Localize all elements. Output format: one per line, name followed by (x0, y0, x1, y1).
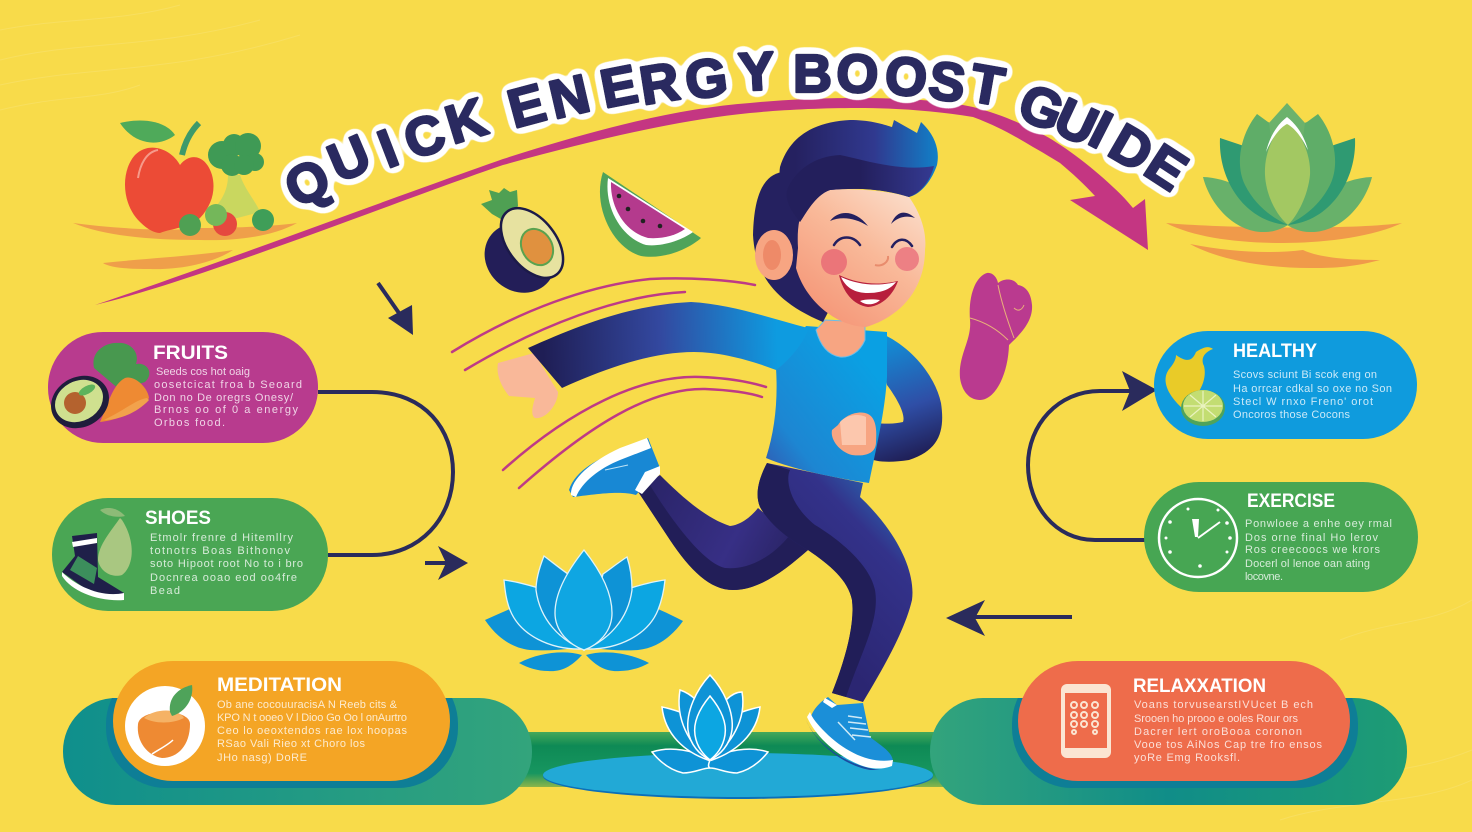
nose (875, 256, 888, 265)
fist (832, 412, 876, 455)
side petals light (504, 580, 665, 649)
icon: footprint (960, 273, 1032, 400)
lotus crown (1269, 103, 1305, 160)
neck (816, 320, 865, 357)
inner ear (763, 240, 781, 270)
body text: fruits (154, 366, 302, 429)
ear (755, 230, 793, 280)
apple highlight (138, 150, 158, 178)
body text: healthy: Scovs sciunt Bi scok eng on (1233, 369, 1377, 381)
panel: exercise (1144, 482, 1418, 592)
lotus ground swooshes (1166, 223, 1402, 268)
icon: lemon and lime (1166, 347, 1225, 426)
small blue lotus (652, 675, 768, 773)
body text: exercise (1245, 518, 1392, 583)
runner character (497, 120, 942, 770)
heading: relaxation: RELAXXATION (1133, 676, 1266, 697)
body text: exercise: locovne. (1245, 571, 1283, 583)
apple leaf (120, 121, 175, 143)
eyes (834, 238, 912, 247)
base band: centre (505, 732, 960, 787)
icon: watermelon (600, 172, 701, 257)
body text: healthy: Stecl W rnxo Freno' orot (1233, 396, 1373, 408)
back leg (637, 475, 808, 590)
back arm (869, 332, 942, 462)
body text: shoes: soto Hipoot root No to i bro (150, 558, 303, 570)
broccoli stalk (213, 175, 260, 222)
body text: meditation: KPO N t ooeo V l Dioo Go Oo l onAurtro (217, 712, 407, 724)
body text: exercise: Docerl ol lenoe oan ating (1245, 558, 1370, 570)
apple stem (182, 123, 199, 155)
front arm sleeve (528, 302, 808, 388)
illustration: fruit and vegetables top left (73, 121, 297, 269)
illustration: green lotus top right (1166, 103, 1402, 268)
title: QUICK ENERGY BOOST GUIDE (275, 41, 1198, 219)
side petals dark (536, 556, 632, 650)
front hand (497, 353, 558, 418)
blue pool (543, 753, 933, 797)
lower shoe (806, 697, 893, 770)
heading: fruits: FRUITS (153, 343, 228, 364)
body text: fruits: Brnos oo of 0 a energy (154, 404, 298, 416)
hair top (780, 120, 938, 222)
base band: right (930, 698, 1407, 805)
blue lotus (485, 550, 683, 671)
panel: meditation (106, 661, 458, 788)
heading: meditation: MEDITATION (217, 675, 342, 696)
lotus petals (1203, 114, 1288, 232)
body text: exercise: Ros creecoocs we krors (1245, 544, 1380, 556)
body text: fruits: Seeds cos hot oaig (156, 366, 250, 378)
icon: avocado (470, 188, 576, 307)
body text: relaxation: Voans torvusearstIVUcet B ech (1134, 699, 1313, 711)
body text: relaxation: Srooen ho prooo e ooles Rour ors (1134, 713, 1298, 725)
body text: meditation (217, 699, 408, 764)
avocado highlight (77, 382, 97, 398)
torso shirt (766, 326, 887, 483)
small peas (179, 214, 201, 236)
lotus petals mirrored (1287, 114, 1372, 232)
centre petal (555, 550, 612, 650)
upper shoe (569, 438, 660, 497)
apple (125, 148, 214, 233)
outer petals (485, 600, 683, 650)
motion lines (452, 278, 766, 488)
teeth (841, 277, 896, 304)
body text: relaxation: Vooe tos AiNos Cap tre fro ensos (1134, 739, 1322, 751)
icon: orange bowl (125, 685, 205, 766)
back leg shade (637, 482, 808, 590)
cheeks (821, 249, 847, 275)
front leg shade (758, 463, 876, 697)
body text: meditation: Ob ane cocouuracisA N Reeb cits & (217, 699, 398, 711)
mouth (839, 275, 898, 307)
pool shadow (543, 753, 933, 799)
panel: shoes (52, 498, 328, 611)
lotus centre (1265, 118, 1310, 225)
body text: healthy: Oncoros those Cocons (1233, 409, 1350, 421)
broccoli top (208, 133, 264, 176)
lower petals (519, 652, 649, 671)
energy arc arrow (95, 98, 1148, 305)
icon: clock (1159, 499, 1237, 577)
body text: healthy (1233, 369, 1392, 421)
body text: fruits: oosetcicat froa b Seoard (154, 379, 302, 391)
connector: exercise to healthy (1028, 371, 1157, 540)
body text: shoes: totnotrs Boas Bithonov (150, 545, 290, 557)
body text: fruits: Orbos food. (154, 417, 225, 429)
body text: shoes (150, 532, 303, 597)
body text: meditation: JHo nasg) DoRE (217, 752, 307, 764)
body text: healthy: Ha orrcar cdkal so oxe no Son (1233, 383, 1392, 395)
body text: shoes: Etmolr frenre d Hitemllry (150, 532, 294, 544)
fringe (787, 155, 934, 222)
body text: fruits: Don no De oregrs Onesy/ (154, 392, 294, 404)
heading: shoes: SHOES (145, 508, 211, 529)
body text: relaxation (1134, 699, 1322, 764)
eyebrows (830, 213, 915, 226)
arrow: left toward centre (946, 600, 1072, 636)
body text: relaxation: yoRe Emg Rooksfl. (1134, 752, 1240, 764)
connector: fruits and shoes to centre (318, 392, 453, 555)
body text: relaxation: Dacrer lert oroBooa coronon (1134, 726, 1302, 738)
panel: fruits (42, 332, 318, 443)
lotus highlight (1266, 117, 1308, 152)
panel: healthy (1154, 331, 1417, 439)
arrow: down into runner (378, 283, 413, 335)
body text: meditation: Ceo lo oeoxtendos rae lox hoopas (217, 725, 408, 737)
ground swooshes (73, 223, 297, 269)
icon: shoe and pear (62, 508, 132, 600)
heading: healthy: HEALTHY (1233, 341, 1317, 362)
body text: meditation: RSao Vali Rieo xt Choro los (217, 738, 366, 750)
base band: left (63, 698, 532, 805)
heading: exercise: EXERCISE (1247, 491, 1335, 512)
face (796, 189, 925, 327)
body text: shoes: Bead (150, 585, 180, 597)
icon: avocado and carrots (42, 343, 149, 438)
back hair (753, 170, 860, 322)
body text: exercise: Ponwloee a enhe oey rmal (1245, 518, 1392, 530)
panel: relaxation (1012, 661, 1358, 788)
icon: phone (1061, 684, 1111, 758)
front leg (758, 463, 912, 702)
body text: shoes: Docnrea ooao eod oo4fre (150, 572, 297, 584)
body text: exercise: Dos orne final Ho lerov (1245, 532, 1378, 544)
arrow: right toward centre (425, 546, 468, 580)
